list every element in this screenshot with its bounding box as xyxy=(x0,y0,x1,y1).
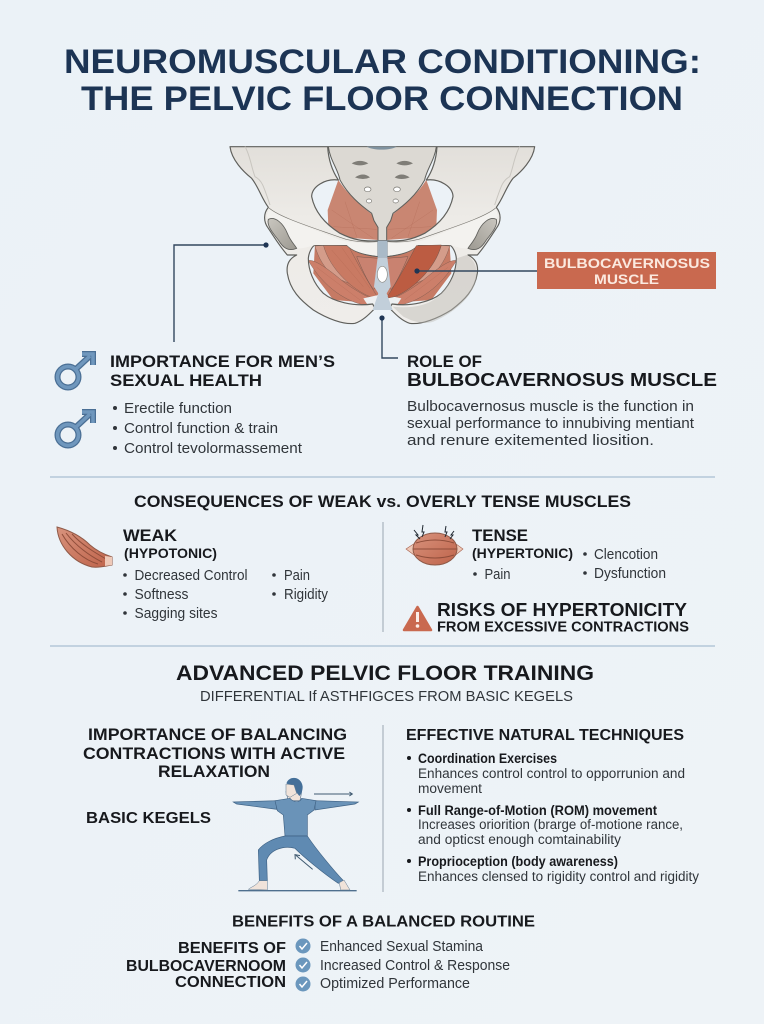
list: weak symptoms: Softness xyxy=(134,587,188,603)
callout: bulbocavernosus muscle label: MUSCLE xyxy=(594,271,659,287)
technique: coordination exercises: Enhances control control to opporrunion and xyxy=(418,766,685,781)
heading: balancing contractions: IMPORTANCE OF BALANCING xyxy=(88,726,347,744)
warning: risks of hypertonicity: RISKS OF HYPERTONICITY xyxy=(437,600,687,620)
label: benefits of bulbocavernoom connection: CONNECTION xyxy=(175,974,286,991)
callout line: role xyxy=(379,315,398,358)
icon: tense muscle xyxy=(406,525,463,565)
list: benefits: Increased Control & Response xyxy=(320,958,510,974)
label: benefits of bulbocavernoom connection: BENEFITS OF xyxy=(178,940,286,957)
list: tense symptoms: Clencotion xyxy=(594,547,658,563)
title: NEUROMUSCULAR CONDITIONING: xyxy=(64,43,701,81)
technique: proprioception xyxy=(407,854,699,884)
list: men's sexual health: Control tevolormassement xyxy=(124,440,303,457)
list: men's sexual health: Erectile function xyxy=(124,400,232,417)
tense heading: TENSE xyxy=(472,527,528,545)
heading: role of bulbocavernosus muscle xyxy=(407,353,717,390)
list: men's sexual health xyxy=(113,400,303,457)
heading: importance for men's sexual health: IMPORTANCE FOR MEN’S xyxy=(110,353,335,371)
illustration: pelvis anatomy xyxy=(230,147,535,324)
text: role description: and renure exitemented liosition. xyxy=(407,433,654,449)
callout: bulbocavernosus muscle label: BULBOCAVERNOSUS xyxy=(544,255,710,271)
technique: coordination exercises: movement xyxy=(418,781,482,796)
icons: check marks xyxy=(296,938,310,992)
weak heading xyxy=(123,527,217,561)
heading: role of bulbocavernosus muscle: ROLE OF xyxy=(407,353,482,371)
list: tense symptoms: Dysfunction xyxy=(594,566,666,582)
technique: full range of motion: and opticst enough comtainability xyxy=(418,832,621,847)
technique: full range of motion: Increases oriorition (brarge of-motione rance, xyxy=(418,817,683,832)
list: weak symptoms: Pain xyxy=(284,568,310,584)
list: weak symptoms: Decreased Control xyxy=(134,568,248,584)
technique: proprioception: Enhances clensed to rigidity control and rigidity xyxy=(418,869,699,884)
label: benefits of bulbocavernoom connection xyxy=(126,940,286,991)
heading: balancing contractions xyxy=(83,726,347,781)
title: THE PELVIC FLOOR CONNECTION xyxy=(81,80,683,118)
subheading: DIFFERENTIAL If ASTHFIGCES FROM BASIC KEGELS xyxy=(200,689,573,705)
technique: coordination exercises xyxy=(407,751,685,796)
heading: importance for men's sexual health: SEXUAL HEALTH xyxy=(110,372,262,390)
tense heading: (HYPERTONIC) xyxy=(472,545,573,561)
text: role description: sexual performance to innubiving mentiant xyxy=(407,416,694,432)
list: tense symptoms: Pain xyxy=(484,567,510,583)
weak heading: (HYPOTONIC) xyxy=(124,545,217,561)
title xyxy=(64,43,701,118)
icon: male symbol xyxy=(58,354,93,388)
icon: warning triangle xyxy=(404,607,431,630)
list: men's sexual health: Control function & train xyxy=(124,420,278,437)
list: benefits: Optimized Performance xyxy=(320,976,470,992)
list: benefits xyxy=(320,939,510,992)
heading: importance for men's sexual health xyxy=(110,353,335,390)
tense heading xyxy=(472,527,573,561)
heading: role of bulbocavernosus muscle: BULBOCAVERNOSUS MUSCLE xyxy=(407,369,717,390)
heading: consequences: CONSEQUENCES OF WEAK vs. OVERLY TENSE MUSCLES xyxy=(134,493,631,511)
warning: risks of hypertonicity: FROM EXCESSIVE CONTRACTIONS xyxy=(437,620,689,636)
callout line: men's health xyxy=(174,242,269,342)
technique: proprioception: Proprioception (body awareness) xyxy=(418,854,618,869)
heading: balancing contractions: RELAXATION xyxy=(158,763,270,781)
callout: bulbocavernosus muscle label xyxy=(537,252,716,289)
heading: advanced pelvic floor training: ADVANCED PELVIC FLOOR TRAINING xyxy=(176,662,594,685)
icon: weak muscle xyxy=(57,527,112,567)
list: weak symptoms xyxy=(123,568,329,622)
text: role description: Bulbocavernosus muscle is the function in xyxy=(407,399,694,415)
icon: male symbol xyxy=(58,412,93,446)
list: benefits: Enhanced Sexual Stamina xyxy=(320,939,484,955)
technique: coordination exercises: Coordination Exercises xyxy=(418,751,557,766)
heading: effective natural techniques: EFFECTIVE NATURAL TECHNIQUES xyxy=(406,727,684,744)
technique: full range of motion xyxy=(407,803,683,847)
illustration: lunge figure xyxy=(233,778,358,891)
heading: balancing contractions: CONTRACTIONS WITH ACTIVE xyxy=(83,745,345,763)
heading: benefits of a balanced routine: BENEFITS OF A BALANCED ROUTINE xyxy=(232,914,535,930)
label: benefits of bulbocavernoom connection: BULBOCAVERNOOM xyxy=(126,958,286,975)
list: weak symptoms: Rigidity xyxy=(284,587,329,603)
list: weak symptoms: Sagging sites xyxy=(134,606,218,622)
weak heading: WEAK xyxy=(123,527,177,545)
technique: full range of motion: Full Range-of-Motion (ROM) movement xyxy=(418,803,657,818)
warning: risks of hypertonicity xyxy=(437,600,689,636)
list: tense symptoms xyxy=(473,547,666,583)
text: role description xyxy=(407,399,694,449)
callout line: muscle label xyxy=(414,268,537,274)
label: basic kegels: BASIC KEGELS xyxy=(86,810,211,827)
